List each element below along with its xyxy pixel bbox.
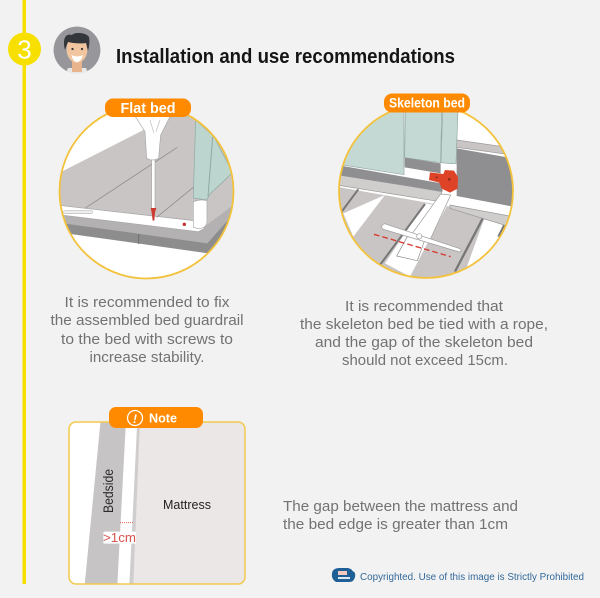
label: flat bed: Flat bed (120, 101, 176, 117)
text: skeleton bed recommendation: It is recommended that (345, 299, 503, 315)
illustration: mattress gap diagram (69, 420, 247, 585)
label: flat bed (105, 98, 191, 117)
text: flat bed recommendation: to the bed with screws to (61, 332, 233, 348)
footer: copyright notice (332, 568, 584, 583)
text: gap explanation (283, 499, 518, 533)
label: greater than 1cm: >1cm (103, 531, 136, 545)
illustration: skeleton bed with rope (338, 112, 514, 279)
step marker: timeline line and number 3: 3 (17, 34, 32, 64)
panel: flat bed (50, 98, 244, 366)
text: skeleton bed recommendation: the skeleton bed be tied with a rope, (300, 317, 548, 333)
text: gap explanation: The gap between the mattress and (283, 499, 518, 515)
text: flat bed recommendation: It is recommended to fix (64, 295, 230, 311)
text: skeleton bed recommendation (300, 299, 548, 369)
illustration: flat bed with screwdriver (58, 104, 237, 278)
label: note badge: Note (149, 410, 177, 426)
label: skeleton bed: Skeleton bed (389, 96, 465, 110)
text: flat bed recommendation: the assembled bed guardrail (50, 313, 244, 329)
label: note badge: ! (133, 412, 137, 426)
icon: blue cloud logo (332, 568, 355, 582)
label: bedside: Bedside (101, 469, 116, 513)
label: note badge (109, 407, 203, 428)
text: gap explanation: the bed edge is greater than 1cm (283, 517, 508, 533)
text: skeleton bed recommendation: and the gap of the skeleton bed (315, 335, 533, 351)
panel: skeleton bed (300, 94, 548, 369)
panel: note (69, 407, 518, 585)
title: Installation and use recommendations (116, 46, 455, 68)
text: flat bed recommendation: increase stability. (90, 350, 204, 366)
icon: smiling man avatar (54, 26, 100, 78)
step marker: timeline line and number 3 (8, 0, 41, 584)
label: mattress: Mattress (163, 497, 211, 512)
text: flat bed recommendation (50, 295, 244, 366)
text: copyright: Copyrighted. Use of this image is Strictly Prohibited (360, 572, 584, 583)
text: skeleton bed recommendation: should not exceed 15cm. (342, 353, 508, 369)
